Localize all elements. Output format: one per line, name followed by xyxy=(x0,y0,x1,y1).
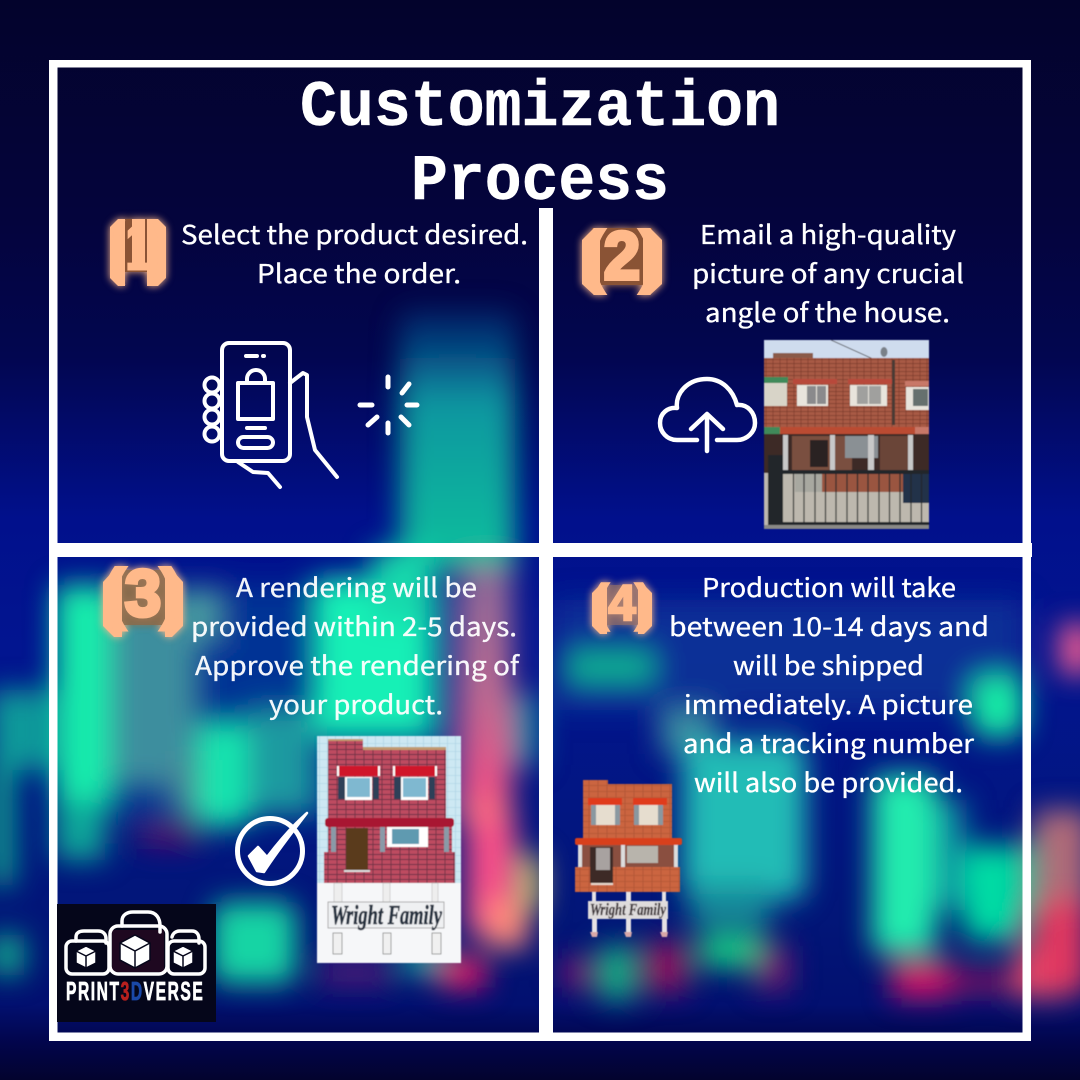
step 3 text: your product. xyxy=(269,685,443,722)
step 2 text: angle of the house. xyxy=(705,293,950,330)
step 3 text: A rendering will be xyxy=(236,568,477,605)
panel: step 4 xyxy=(575,568,989,937)
badge: step 4 number: (4) xyxy=(592,575,652,631)
logo: Print3DVerse xyxy=(57,904,216,1022)
step 4 text: immediately. A picture xyxy=(684,685,973,722)
panel: step 2 xyxy=(582,215,964,529)
step 2 text: picture of any crucial xyxy=(692,254,964,291)
step 4 text: between 10-14 days and xyxy=(669,607,989,644)
logo: Print3DVerse: PRINT3DVERSE xyxy=(66,977,203,1006)
image: finished house model xyxy=(575,780,682,937)
step 2 text xyxy=(692,215,964,330)
image: house model rendering xyxy=(317,736,461,963)
title: Process xyxy=(411,145,669,219)
badge: step 2 number: (2) xyxy=(582,218,662,294)
badge: step 3 number: (3) xyxy=(103,556,183,630)
step 3 text: provided within 2-5 days. xyxy=(191,607,517,644)
icon: cloud upload xyxy=(660,379,755,451)
title: Customization xyxy=(300,71,780,145)
image: house model rendering: Wright Family xyxy=(331,900,443,930)
panel: step 1 xyxy=(109,209,528,487)
step 4 text: and a tracking number xyxy=(683,724,975,761)
photo: brick row house xyxy=(764,340,929,529)
step 1 text xyxy=(181,215,528,291)
icon: loading spinner xyxy=(360,377,417,433)
icon: hand holding phone with shopping bag xyxy=(204,343,337,487)
step 3 text xyxy=(191,568,521,722)
step 4 text: Production will take xyxy=(702,568,956,605)
step 4 text: will also be provided. xyxy=(694,763,963,800)
step 3 text: Approve the rendering of xyxy=(195,646,521,683)
step 2 text: Email a high-quality xyxy=(700,215,956,252)
title xyxy=(300,71,780,219)
badge: step 1 number: (1) xyxy=(109,209,167,285)
step 4 text: will be shipped xyxy=(733,646,924,683)
panel: step 3 xyxy=(57,556,521,1022)
step 4 text xyxy=(669,568,989,800)
badge: step 1 number xyxy=(109,209,167,286)
icon: check mark in circle xyxy=(238,813,307,884)
image: finished house model: Wright Family xyxy=(590,900,666,919)
step 1 text: Place the order. xyxy=(257,254,461,291)
step 1 text: Select the product desired. xyxy=(181,215,528,252)
